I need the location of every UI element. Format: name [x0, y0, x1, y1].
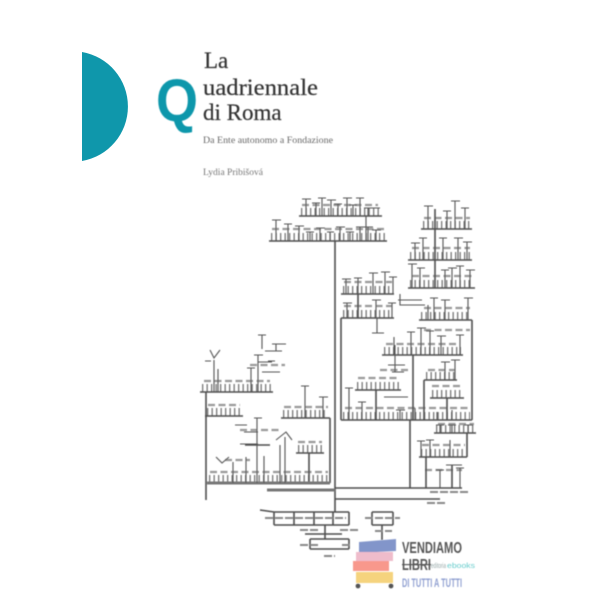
left branches	[205, 335, 286, 392]
subtitle: Da Ente autonomo a Fondazione	[203, 136, 333, 146]
main connector lines	[200, 209, 476, 549]
lower right branches	[417, 425, 473, 488]
title line di Roma: di Roma	[203, 100, 282, 125]
small label ebooks: ebooks	[447, 563, 476, 570]
logo text DI TUTTI A TUTTI: DI TUTTI A TUTTI	[402, 578, 462, 590]
logo text VENDIAMO: VENDIAMO	[402, 540, 462, 557]
book stack logo	[353, 539, 476, 590]
left wheel	[356, 584, 360, 588]
mid branches	[345, 328, 464, 420]
dense stems layer	[202, 212, 474, 479]
centre branches	[342, 272, 473, 333]
dense label rows	[204, 205, 474, 472]
blue book	[359, 539, 396, 553]
title line uadriennale: uadriennale	[203, 75, 318, 100]
title block	[156, 48, 333, 178]
thick bars	[207, 483, 335, 490]
salmon book	[353, 561, 389, 571]
lower left branches	[216, 386, 328, 483]
organisation tree diagram	[200, 198, 476, 556]
title line La: La	[204, 48, 228, 73]
yellow book	[356, 572, 393, 583]
teal half circle	[82, 52, 128, 161]
top right branches	[408, 201, 475, 288]
logo strike line	[402, 564, 431, 565]
small label editoria: editoria	[431, 563, 446, 570]
top left branches	[272, 198, 381, 241]
title letter Q: Q	[156, 67, 198, 134]
pink book	[356, 552, 393, 561]
right wheel	[389, 584, 393, 588]
bottom box labels	[265, 492, 470, 556]
logo text LIBRI: LIBRI	[402, 557, 431, 574]
author: Lydia Pribišová	[203, 168, 264, 178]
